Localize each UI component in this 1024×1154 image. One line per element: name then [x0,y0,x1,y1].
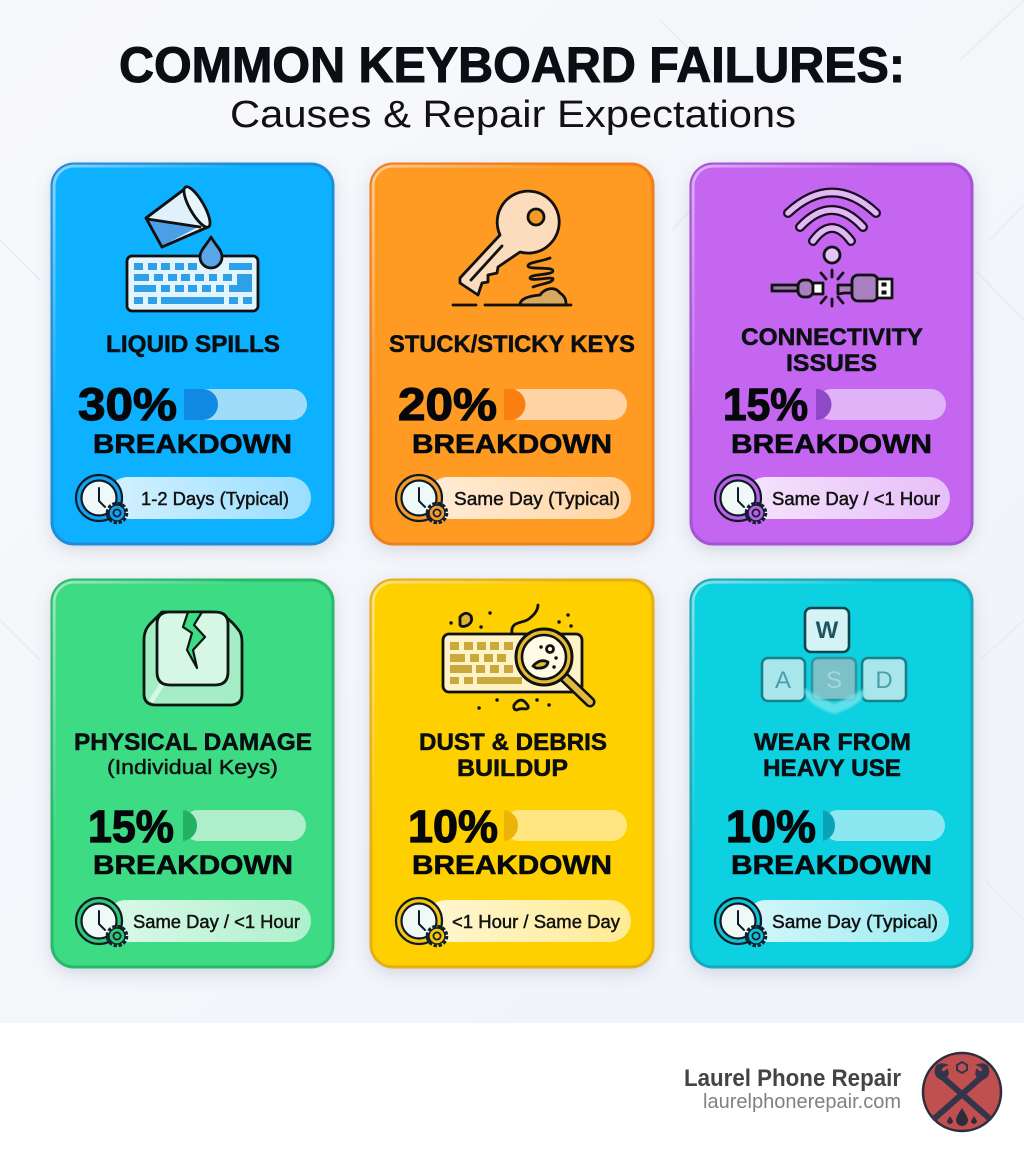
percent 30%: 30% [78,379,177,430]
subheading: (Individual Keys) [107,757,278,779]
heading: CONNECTIVITY [741,324,923,351]
percent 15%: 15% [88,801,174,852]
progress bar [823,810,945,841]
card background [371,580,653,967]
percent 10%: 10% [408,801,498,852]
footer band [0,1023,1024,1154]
repair time pill [715,898,949,946]
progress bar [504,389,627,420]
repair time pill [396,898,631,946]
heading [754,729,911,782]
icon: worn WASD keys: A [775,667,791,694]
repair time pill: 1-2 Days (Typical) [141,489,289,509]
heading: LIQUID SPILLS [106,331,280,358]
progress bar [184,389,307,420]
heading [419,729,607,782]
icon: worn WASD keys: W [816,617,839,644]
percent 20%: 20% [398,379,497,430]
footer brand name: Laurel Phone Repair [684,1065,901,1092]
heading: STUCK/STICKY KEYS [389,331,635,358]
repair time pill [76,898,311,946]
heading [741,324,923,377]
icon: dusty keyboard and magnifier [443,605,590,710]
breakdown label: BREAKDOWN [731,429,932,459]
heading: ISSUES [786,350,877,377]
repair time pill: Same Day (Typical) [772,912,938,932]
title: COMMON KEYBOARD FAILURES: [119,37,905,93]
icon: worn WASD keys [762,608,906,714]
percent 15%: 15% [723,379,808,430]
heading: HEAVY USE [763,755,901,782]
repair time pill: Same Day / <1 Hour [133,912,300,932]
card background [691,164,972,544]
panel: wear from heavy use [691,580,972,967]
panel: dust and debris [371,580,653,967]
card background [52,580,333,967]
icon: logo crossed wrenches [923,1053,1001,1131]
footer url: laurelphonerepair.com [703,1091,901,1113]
repair time pill [396,475,631,523]
heading: BUILDUP [457,755,568,782]
card background [371,164,653,544]
progress bar [816,389,946,420]
icon: worn WASD keys: D [875,667,893,694]
card background [52,164,333,544]
icon: worn WASD keys: S [826,667,842,694]
icon: wifi and broken cable [772,192,892,306]
repair time pill: <1 Hour / Same Day [452,912,620,932]
icon: cracked keycap [144,612,242,705]
repair time pill: Same Day (Typical) [454,489,620,509]
repair time pill [715,475,950,523]
panel: physical damage [52,580,333,967]
heading: WEAR FROM [754,729,911,756]
subtitle: Causes & Repair Expectations [230,94,796,136]
percent 10%: 10% [726,801,816,852]
panel: stuck keys [371,164,653,544]
panel: liquid spills [52,164,333,544]
progress bar [183,810,306,841]
breakdown label: BREAKDOWN [412,850,612,880]
card background [691,580,972,967]
repair time pill: Same Day / <1 Hour [772,489,940,509]
breakdown label: BREAKDOWN [412,429,612,459]
panel: connectivity issues [691,164,972,544]
breakdown label: BREAKDOWN [731,850,932,880]
breakdown label: BREAKDOWN [93,850,293,880]
icon: key and spring [453,191,571,305]
heading: PHYSICAL DAMAGE [74,729,312,756]
progress bar [504,810,627,841]
heading: DUST & DEBRIS [419,729,607,756]
icon: glass pouring onto keyboard [127,184,258,311]
repair time pill [76,475,311,523]
breakdown label: BREAKDOWN [93,429,292,459]
